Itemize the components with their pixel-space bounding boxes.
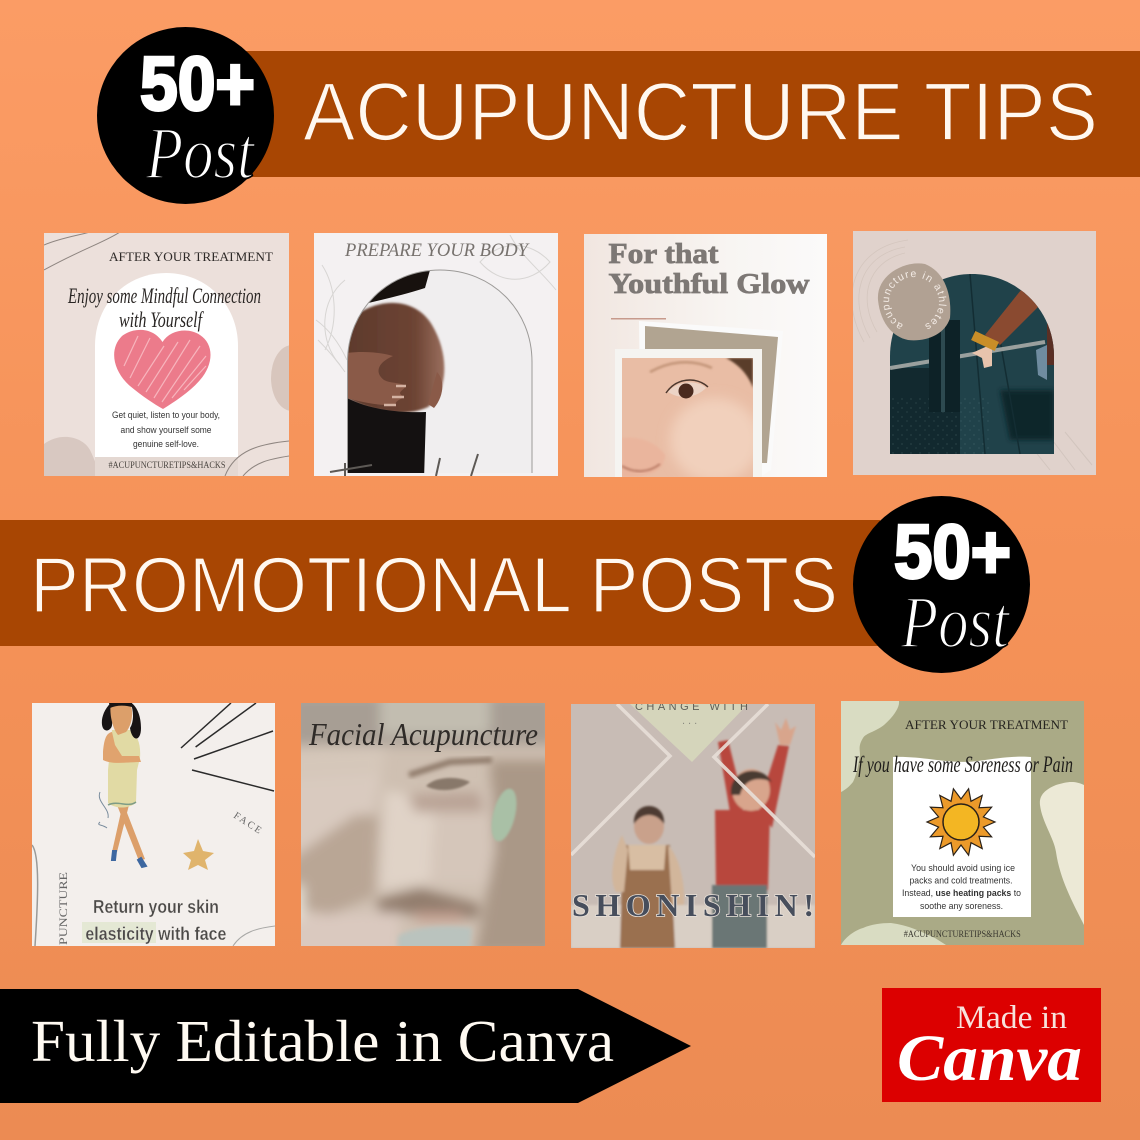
ribbon: fully editable in canva bbox=[0, 989, 691, 1103]
badge: 50+ post middle bbox=[853, 496, 1030, 673]
photo: two children bbox=[571, 718, 815, 948]
post card: after your treatment, heart: genuine self-love. bbox=[133, 439, 199, 449]
post card: after your treatment, heart: AFTER YOUR TREATMENT bbox=[109, 250, 273, 264]
post card: acupuncture in athletes bbox=[853, 231, 1096, 475]
post card: after your treatment, heart: Enjoy some Mindful Connection bbox=[67, 283, 261, 308]
banner: promotional posts bbox=[0, 520, 880, 646]
post card: soreness or pain: soothe any soreness. bbox=[920, 901, 1003, 912]
badge: made in canva: Canva bbox=[897, 1022, 1082, 1095]
ribbon: fully editable in canva: Fully Editable in Canva bbox=[31, 1008, 614, 1074]
post card: for that youthful glow: Youthful Glow bbox=[608, 268, 810, 300]
post card: prepare your body bbox=[314, 233, 558, 480]
post card: soreness or pain: #ACUPUNCTURETIPS&HACKS bbox=[904, 930, 1021, 940]
post card: shonishin bbox=[571, 701, 815, 948]
post card: after your treatment, heart: with Yourself bbox=[119, 307, 204, 332]
post card: soreness or pain bbox=[841, 701, 1084, 945]
photo: pregnant belly in arch bbox=[348, 271, 446, 473]
post card: shonishin: SHONISHIN! bbox=[572, 887, 814, 923]
badge: 50+ post top: 50+ bbox=[140, 42, 255, 127]
illustration: woman in dress bbox=[99, 702, 146, 867]
badge: 50+ post top: Post bbox=[145, 113, 256, 195]
banner: acupuncture tips bbox=[240, 51, 1140, 177]
photo: man's face bbox=[301, 703, 545, 946]
needles bbox=[181, 703, 274, 791]
post card: facial acupuncture bbox=[301, 703, 545, 946]
icon: sun bbox=[927, 789, 995, 855]
post card: soreness or pain: Instead, use heating packs to bbox=[902, 888, 1021, 899]
post card: soreness or pain: You should avoid using ice bbox=[911, 863, 1015, 874]
post card: soreness or pain: AFTER YOUR TREATMENT bbox=[905, 717, 1068, 732]
post card: facial acupuncture: Facial Acupuncture bbox=[308, 716, 538, 752]
icon: gold star bbox=[183, 839, 214, 870]
post card: soreness or pain: packs and cold treatments. bbox=[910, 876, 1012, 886]
photo: woman's eye bbox=[622, 358, 760, 482]
post card: after your treatment, heart: Get quiet, listen to your body, bbox=[112, 410, 220, 420]
post card: after your treatment, heart bbox=[44, 232, 313, 476]
post card: after your treatment, heart: and show yourself some bbox=[120, 425, 212, 435]
circular label: acupuncture in athletes bbox=[883, 271, 946, 329]
post card: after your treatment, heart: #ACUPUNCTURETIPS&HACKS bbox=[108, 461, 226, 471]
post card: for that youthful glow bbox=[584, 234, 827, 482]
post card: prepare your body: PREPARE YOUR BODY bbox=[344, 240, 530, 261]
badge: 50+ post top bbox=[97, 27, 274, 204]
post card: return your skin elasticity: PUNCTURE bbox=[56, 872, 70, 945]
badge: 50+ post middle: 50+ bbox=[894, 510, 1011, 595]
banner title: PROMOTIONAL POSTS bbox=[30, 540, 838, 629]
post card: return your skin elasticity: FACE bbox=[231, 810, 265, 837]
post card: return your skin elasticity: elasticity with face bbox=[85, 924, 226, 944]
crossed lines bbox=[571, 704, 815, 857]
rings bbox=[852, 240, 908, 342]
post card: return your skin elasticity: Return your skin bbox=[93, 897, 219, 917]
banner title: ACUPUNCTURE TIPS bbox=[303, 65, 1098, 158]
post card: shonishin: ... bbox=[682, 715, 700, 727]
badge: made in canva bbox=[882, 988, 1101, 1102]
photo: barbell in arch bbox=[890, 274, 1054, 454]
post card: return your skin elasticity bbox=[32, 702, 275, 946]
post card: shonishin: CHANGE WITH bbox=[635, 701, 748, 713]
badge: made in canva: Made in bbox=[956, 1000, 1067, 1036]
badge: 50+ post middle: Post bbox=[900, 582, 1011, 664]
post card: for that youthful glow: For that bbox=[608, 238, 719, 270]
icon: heart bbox=[114, 330, 210, 409]
